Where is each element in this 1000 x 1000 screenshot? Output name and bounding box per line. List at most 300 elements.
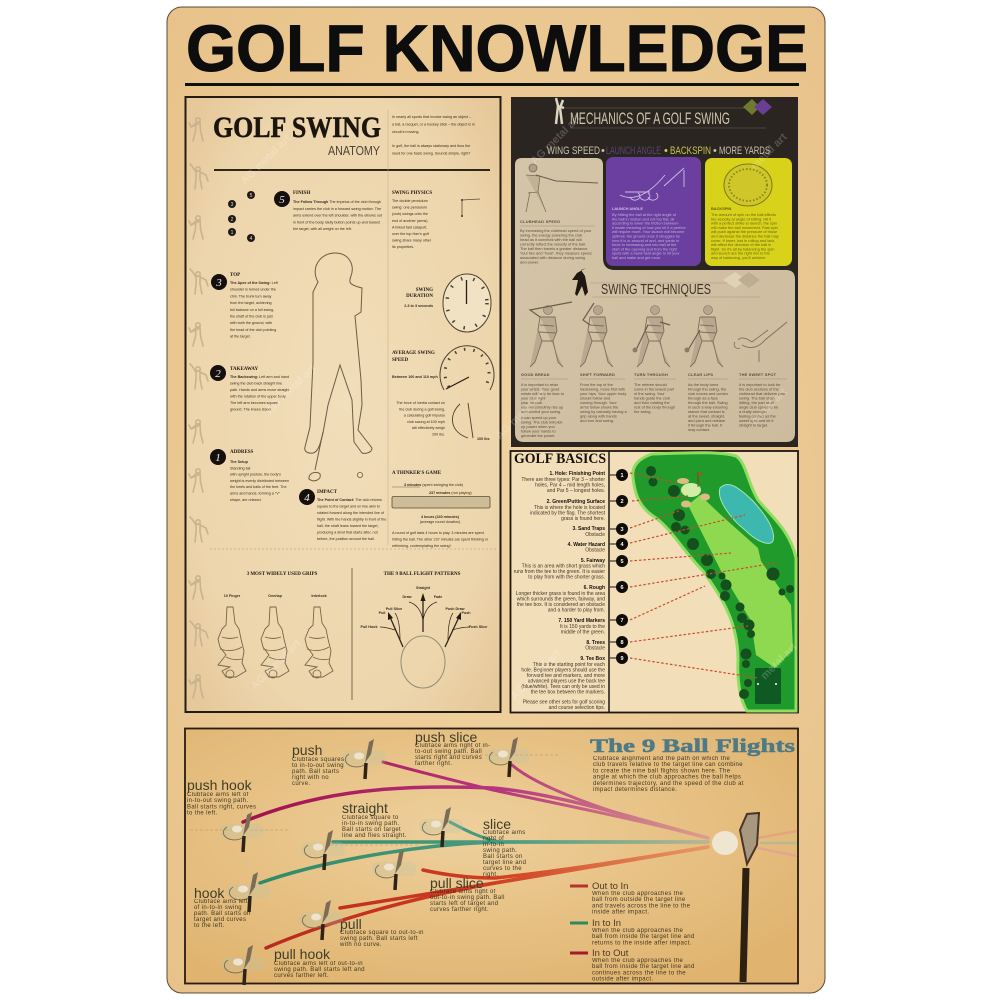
card: backspin: will affect the direction of the ball in <box>711 242 771 247</box>
legend: in to in: In to In <box>592 918 621 929</box>
legend: in to in <box>570 918 695 946</box>
clubhead speed note: will effectively weigh <box>412 426 445 430</box>
basics definitions <box>514 471 606 711</box>
metal sign board <box>167 7 825 993</box>
step 5 finish: 5 <box>279 194 285 206</box>
label: hook: of in-to-in swing <box>194 905 242 911</box>
basics definitions: Obstacle <box>585 646 605 652</box>
label: pull hook: swing path. Ball starts left and <box>274 967 365 973</box>
label: pull hook: pull hook <box>274 946 331 962</box>
card: clubhead speed: head as it connects with the ball will <box>520 237 582 242</box>
label: hook: to the left. <box>194 923 225 929</box>
step 5 finish: FINISH <box>293 191 310 196</box>
step 2 takeaway: The left arm becomes square <box>230 401 278 405</box>
card: clubhead speed: CLUBHEAD SPEED <box>520 219 560 224</box>
label: push: curve. <box>292 781 310 787</box>
legend: in to out: outside after impact. <box>592 977 653 983</box>
technique text columns: straight to target. <box>739 422 768 428</box>
panel: the 9 ball flights <box>185 728 798 985</box>
card: clubhead speed: associated with distance during swing <box>520 255 585 260</box>
watermarks <box>239 112 800 702</box>
intro text: In golf, the ball is always stationary and thus the <box>392 144 470 148</box>
heading: The 9 Ball Flights <box>590 736 795 757</box>
card: launch angle: will require more. Your launch will become <box>612 229 684 234</box>
technique text columns: may contact. <box>688 427 710 432</box>
small clubs and balls <box>220 737 530 985</box>
technique text columns: year on club <box>521 400 542 405</box>
technique text columns: you will smoothly rise up <box>521 404 563 410</box>
intro text: In nearly all sports that involve swing an object – <box>392 115 471 119</box>
technique text columns: come in the lowest part <box>634 386 675 392</box>
step 3 top: TOP <box>230 273 240 278</box>
technique text columns: at the sweet, straight, <box>688 414 725 418</box>
heading: golf swing: GOLF SWING <box>213 111 381 144</box>
step 4 impact: square to the target and on line akin to <box>317 504 380 508</box>
legend: out to in <box>570 881 691 916</box>
basics definitions: runs from the tee to the green. It is easier <box>514 569 605 575</box>
subtitle factors: • <box>664 145 668 157</box>
ball flight patterns: Pull Slice <box>386 607 402 611</box>
label: straight: in-to-in swing path. <box>342 821 399 827</box>
numbered markers: 1 <box>620 473 624 479</box>
intro text: a bat, a racquet, or a hockey stick – the object is in <box>392 122 475 126</box>
basics definitions: 8. Trees <box>586 640 605 646</box>
tee box <box>755 668 781 704</box>
step 4 impact: ball, the shaft leans toward the target, <box>317 524 378 528</box>
numbered markers: 4 <box>620 542 624 548</box>
label: pull hook: Clubface aims left of out-to-in <box>274 961 363 967</box>
numbered markers: 6 <box>620 585 624 591</box>
card: launch angle <box>606 157 701 266</box>
step 3 top: from the target, achieving <box>230 301 272 305</box>
step 1 address: shape, are relaxed. <box>230 498 262 502</box>
mechanics heading <box>556 98 766 128</box>
subtitle factors: LAUNCH ANGLE <box>606 145 661 157</box>
label: hook <box>194 885 251 929</box>
basics definitions: Obstacle <box>585 532 605 538</box>
watermarks: AG metal art <box>509 647 564 702</box>
panel: mechanics of a golf swing <box>511 97 798 447</box>
label: push: right with no <box>292 775 329 781</box>
watermarks: AG metal art <box>529 112 584 167</box>
card: clubhead speed: By increasing the clubhead speed of your <box>520 228 591 233</box>
ball flight patterns: Pull Hook <box>360 625 378 629</box>
swing duration clock: DURATION <box>406 294 433 299</box>
step 2 takeaway: path. Hands and arms move straight <box>230 388 289 392</box>
basics definitions: hole. Beginner players should use the <box>521 668 605 674</box>
swing physics: swing: one pendulum <box>392 206 427 210</box>
step 3 top <box>211 273 278 339</box>
label: pull: pull <box>340 916 362 932</box>
technique text columns: and pivot and release <box>688 418 725 423</box>
subtitle factors: BACKSPIN <box>670 145 711 157</box>
heading: golf swing: ANATOMY <box>328 143 380 158</box>
basics definitions: 1. Hole: Finishing Point <box>549 471 605 477</box>
technique text columns: CLEAR LIPS <box>688 372 713 377</box>
swing physics <box>392 191 480 249</box>
step 4 impact: producing a divot that starts after, not <box>317 530 378 534</box>
legend: in to out: In to Out <box>592 948 629 959</box>
basics definitions: which surrounds the green, fairway, and <box>517 596 605 602</box>
technique text columns: GOOD BREAK <box>521 372 550 377</box>
step 3 top: the shaft of the club is just <box>230 314 273 318</box>
basics definitions: There are three types: Par 3 – shorter <box>521 477 605 483</box>
intro text: circuit in moving. <box>392 130 419 134</box>
step 2 takeaway: swing the club back straight line <box>230 382 282 386</box>
intro: determines trajectory, and the speed of the club at <box>593 781 744 787</box>
label: pull slice: curves farther right. <box>430 907 489 913</box>
card: backspin: the velocity at angle of lofting. Hit it <box>711 216 772 221</box>
label: push slice: Clubface aims right of in- <box>415 743 490 749</box>
step 3 top: with both the ground, with <box>230 321 272 325</box>
card: launch angle: By hitting the ball at the right angle of <box>612 212 676 217</box>
label: hook: path. Ball starts on <box>194 911 251 917</box>
technique text columns: SHIFT FORWARD <box>580 372 615 377</box>
card: backspin: cover. If lower, lost in rolling and lack, <box>711 238 775 243</box>
swing physics: SWING PHYSICS <box>392 191 432 196</box>
section dividers <box>210 110 498 700</box>
technique text columns: your club right <box>521 396 546 400</box>
subtitle factors: • <box>713 145 717 157</box>
technique text columns: stance that contact is <box>688 409 725 414</box>
step 5 finish: in front of the body. Belly button points up and toward <box>293 220 380 224</box>
legend: out to in: inside after impact. <box>592 910 649 916</box>
card: launch angle: start of the opening and from the right <box>612 246 678 251</box>
position dots: 4 <box>250 236 253 242</box>
legend: in to out: When the club approaches the <box>592 958 683 964</box>
technique text columns: swing. The club will pick <box>521 420 562 424</box>
golf course map <box>630 453 796 711</box>
legend: out to in: ball from outside the target line <box>592 897 686 903</box>
card: backspin: flight. So it's all by balancing the spin <box>711 246 774 251</box>
card: backspin: will make the ball movement. Fast spin <box>711 225 778 230</box>
card: clubhead speed: The ball then travels a greater distance. <box>520 246 588 251</box>
label: pull slice: starts left of target and <box>430 901 498 907</box>
clubhead speed note: 200 lbs. <box>432 432 445 436</box>
technique text columns: sweet spot and let it <box>739 418 774 423</box>
card: backspin: way of balancing, you'll achieve <box>711 255 765 260</box>
watermarks: AG metal art <box>249 637 304 692</box>
label: pull slice: out-to-in swing path. Ball <box>430 895 505 901</box>
basics definitions: the tee box. It is considered an obstacle <box>517 602 605 608</box>
card: launch angle: how it is or around of and, and yards in <box>612 238 679 243</box>
label: pull: swing path. Ball starts left <box>340 936 418 942</box>
technique text columns: It is important to relax <box>521 382 558 387</box>
label: straight: Ball starts on target <box>342 827 401 833</box>
technique text columns: From the top of the <box>580 382 613 387</box>
label: slice: right of <box>483 836 504 842</box>
swing physics: A linked fast catapult, <box>392 225 427 229</box>
basics definitions: advanced players use the back tee <box>528 678 605 684</box>
card: clubhead speed: and power. <box>520 260 539 264</box>
technique text columns: angle club speed to be <box>739 404 778 410</box>
a thinker's game <box>392 471 490 548</box>
basics definitions: middle of the green. <box>561 630 605 636</box>
step 5 finish: the target, with all weight on the left. <box>293 227 352 231</box>
step 3 top: full balance on a full swing, <box>230 308 274 312</box>
basics definitions: This is the starting point for each <box>533 662 605 668</box>
card: clubhead speed and swing techniques background <box>515 158 795 442</box>
step 3 top: The Apex of the Swing: Left <box>230 281 278 285</box>
subtitle factors: WING SPEED <box>547 145 600 157</box>
basics definitions: holes, Par 4 – mid length holes, <box>535 482 605 488</box>
ball flight patterns: Push Draw <box>445 607 465 611</box>
technique figures <box>530 302 787 367</box>
technique text columns: of the swing. Your <box>634 391 665 396</box>
legend: in to in: returns to the inside after impact. <box>592 940 692 946</box>
numbered markers: 8 <box>620 640 624 646</box>
label: push: to in-to-out swing <box>292 763 344 769</box>
swing duration clock: SWING <box>416 288 433 293</box>
ball flight patterns: THE 9 BALL FLIGHT PATTERNS <box>384 572 461 577</box>
technique text columns: follow your hands to <box>521 428 556 434</box>
clubhead speed note: The force of inertia contact on <box>396 401 445 405</box>
technique text columns: your wrists. Your good <box>521 386 559 392</box>
technique text columns <box>521 372 787 438</box>
average speed gauge <box>392 346 494 390</box>
label: push slice: farther right. <box>415 761 452 767</box>
clubhead speed note: the club during a golf swing, <box>399 407 445 411</box>
technique text columns: backswing, move first with <box>580 386 625 392</box>
a thinker's game: 3 minutes (spent swinging the club) <box>404 483 463 487</box>
step 3 top: shoulder is turned under the <box>230 288 276 292</box>
card: backspin: with a perfect strike to launch, the spin <box>711 221 777 226</box>
numbered markers: 5 <box>620 559 624 565</box>
grips: Interlock <box>311 594 328 598</box>
position dots: 1 <box>231 230 234 236</box>
basics definitions: It is 150 yards to the <box>560 624 605 630</box>
step 2 takeaway: ground. The knees stand. <box>230 408 272 412</box>
step 4 impact: IMPACT <box>317 490 338 495</box>
step 2 takeaway: 2 <box>215 368 221 380</box>
legend: out to in: When the club approaches the <box>592 891 683 897</box>
swing duration clock <box>404 274 491 332</box>
technique text columns: grip along with hands <box>580 414 617 418</box>
swing physics: swing share many other <box>392 239 432 243</box>
label: push slice: starts right and curves <box>415 755 482 761</box>
card: launch angle: ball and make and get more. <box>612 255 661 260</box>
label: push: Clubface squares <box>292 757 344 763</box>
technique text columns: TURN THROUGH <box>634 372 668 377</box>
trees <box>646 466 794 699</box>
basics definitions: and Par 5 – longest holes. <box>547 488 605 494</box>
legend: in to in: ball from inside the target line and <box>592 934 695 940</box>
basics definitions: Longer thicker grass is found in the area <box>516 591 605 597</box>
basics definitions: 7. 150 Yard Markers <box>558 618 605 624</box>
technique text columns: swing by naturally having a <box>580 409 628 414</box>
technique text columns: hands guide the club <box>634 396 670 400</box>
technique text columns: the club sections of the <box>739 386 779 392</box>
ball flight patterns: Straight <box>416 586 431 590</box>
label: straight: Clubface square to <box>342 815 399 821</box>
ball flight patterns: Pull <box>379 611 385 615</box>
numbered markers: 9 <box>620 656 624 662</box>
label: push hook: push hook <box>187 777 253 793</box>
watermarks: metal art <box>749 386 790 427</box>
step 2 takeaway <box>210 365 289 412</box>
label: pull slice <box>430 875 505 913</box>
label: push: path. Ball starts <box>292 769 339 775</box>
ball flight patterns: Fade <box>434 595 442 599</box>
technique text columns: rest of the body through <box>634 404 675 410</box>
average speed gauge: AVERAGE SWING <box>392 351 435 356</box>
technique text columns: your hips. Your upper body <box>580 391 626 396</box>
clubhead speed note: 100 lbs <box>477 437 490 441</box>
card: launch angle: it inside meaning of how you hit it a perfect <box>612 225 686 230</box>
label: slice: Clubface aims <box>483 830 526 836</box>
step 1 address <box>210 449 289 502</box>
label: push slice <box>415 729 490 767</box>
step 4 impact: flight. With the hands slightly in front of the <box>317 518 386 522</box>
watermarks: AG metal art <box>264 362 319 417</box>
technique text columns: clubhead that delivers your <box>739 391 786 396</box>
swing techniques heading <box>572 268 760 298</box>
step 3 top: the head of the club pointing <box>230 328 276 332</box>
basics definitions: Obstacle <box>585 548 605 554</box>
intro: to create the nine ball flights shown here. The <box>593 768 731 774</box>
label: push hook: Ball starts right, curves <box>187 804 256 810</box>
step 4 impact <box>299 489 386 541</box>
basics definitions: This is where the hole is located <box>534 505 605 511</box>
label: hook: target and curves <box>194 917 246 923</box>
rough <box>633 453 796 711</box>
step 1 address: 1 <box>215 452 221 464</box>
step 1 address: arms and hands, forming a "V" <box>230 492 281 496</box>
card: launch angle: according to lower the friction between <box>612 221 678 226</box>
label: straight: straight <box>342 800 388 816</box>
step 5 finish <box>274 191 382 231</box>
watermarks: metal art <box>749 131 790 172</box>
a thinker's game: A THINKER'S GAME <box>392 471 442 476</box>
card: backspin: will push against the pressure of those <box>711 229 777 234</box>
subtitle factors: • <box>601 145 605 157</box>
clubhead speed note: club swung at 100 mph <box>407 420 445 424</box>
grips <box>218 572 333 678</box>
label: slice: target line and <box>483 860 526 866</box>
legend: in to in: When the club approaches the <box>592 928 683 934</box>
basics definitions: and a harder to play from. <box>548 608 605 614</box>
label: hook: Clubface aims left <box>194 899 248 905</box>
technique text columns: It is important to look for <box>739 382 781 387</box>
step 3 top: 3 <box>215 277 222 289</box>
fairway <box>688 495 793 668</box>
label: pull: with no curve. <box>339 942 382 948</box>
decorative diamonds <box>743 99 772 115</box>
flight paths <box>243 762 708 948</box>
step 3 top: at the target. <box>230 335 251 339</box>
step 4 impact: before, the position around the ball. <box>317 537 375 541</box>
a thinker's game: 237 minutes (not playing) <box>429 491 472 495</box>
label: push hook: Clubface aims left of <box>187 792 249 798</box>
label: push <box>292 742 344 787</box>
ball flight patterns: Push <box>461 611 471 615</box>
technique text columns: in such a way ensuring <box>688 404 728 410</box>
technique text columns: feeling contact as the <box>739 414 776 418</box>
card: backspin: The amount of spin on the ball affects <box>711 212 776 217</box>
card: launch angle: LAUNCH ANGLE <box>612 206 643 211</box>
label: slice: in-to-in <box>483 842 504 848</box>
technique text columns: should follow and <box>580 396 610 400</box>
technique text columns: it through the ball. It <box>688 422 723 428</box>
mechanics heading: MECHANICS OF A GOLF SWING <box>570 109 730 128</box>
large club and ball <box>712 813 759 982</box>
label: pull hook <box>274 946 365 979</box>
a thinker's game: A round of golf lasts 4 hours to play. 3 minutes are spent <box>392 531 484 535</box>
card: launch angle: force in increasing and into ball at the <box>612 242 676 247</box>
intro: angle at which the club approaches the ball helps <box>593 775 741 781</box>
label: slice <box>483 816 526 878</box>
legend: in to out <box>570 948 695 983</box>
grips: Overlap <box>268 594 283 598</box>
position dots: 3 <box>231 202 234 208</box>
ball flight patterns: Push Slice <box>469 625 487 629</box>
panel: golf basics <box>510 451 798 712</box>
label: pull slice: Clubface aims right of <box>430 889 496 895</box>
exit lines <box>758 831 797 856</box>
basics definitions: 5. Fairway <box>581 558 605 564</box>
technique text columns: and then rotating the <box>634 400 670 405</box>
intro: impact determines distance. <box>593 787 677 793</box>
grips: 10 Finger <box>224 594 241 598</box>
a thinker's game: 4 hours (240 minutes) <box>421 515 460 519</box>
legend: out to in: Out to In <box>592 881 628 892</box>
step 5 finish: The Follow Through The impetus of the club through <box>293 200 381 204</box>
step 5 finish: impact carries the club in a forward swing motion. The <box>293 207 381 211</box>
label: push hook: to the left. <box>187 811 218 817</box>
ball flight patterns: Draw <box>402 595 412 599</box>
card: clubhead speed: swing, the energy powering the club <box>520 232 582 238</box>
label: slice: slice <box>483 816 511 832</box>
label: slice: Ball starts on <box>483 854 523 860</box>
label: pull hook: curves farther left. <box>274 973 329 979</box>
basics definitions: 2. Green/Putting Surface <box>547 499 605 505</box>
label: push hook <box>187 777 256 817</box>
clubhead speed note <box>396 401 490 441</box>
basics definitions: forward tee and markers, and more <box>527 673 605 679</box>
technique text columns: As the body turns <box>688 382 718 387</box>
watermarks: AG metal art <box>494 387 549 442</box>
pond <box>719 484 773 543</box>
ball flight patterns <box>360 572 487 688</box>
technique text columns: through the swing, the <box>688 386 726 392</box>
swing physics: its properties. <box>392 245 414 249</box>
swing physics: The double pendulum <box>392 199 428 203</box>
basics definitions: grass is found here. <box>561 516 605 522</box>
technique text columns: club moves and comes <box>688 391 728 396</box>
subtitle factors: MORE YARDS <box>719 145 770 157</box>
numbered markers: 7 <box>620 618 624 624</box>
legend: in to out: ball from inside the target line and <box>592 964 695 970</box>
a thinker's game: (average round duration) <box>420 520 460 524</box>
label: push slice: to-out swing path. Ball <box>415 749 482 755</box>
card: backspin: BACKSPIN <box>711 206 732 211</box>
step 1 address: ADDRESS <box>230 450 254 455</box>
label: pull: Clubface square to out-to-in <box>340 930 424 936</box>
technique text columns: wrists will help be face to <box>521 391 564 396</box>
step 2 takeaway: TAKEAWAY <box>230 367 258 372</box>
technique text columns: coming through. Your <box>580 400 617 405</box>
step 3 top: chin. The trunk turn away <box>230 294 271 298</box>
swing physics: (club) swings onto the <box>392 212 428 216</box>
target line <box>190 755 560 845</box>
technique text columns: and control your swing. <box>521 409 561 414</box>
technique text columns: THE SWEET SPOT <box>739 372 777 377</box>
basics definitions: Please see other sets for golf scoring <box>523 700 605 706</box>
intro: club travels relative to the target line can combine <box>593 762 743 768</box>
title: GOLF KNOWLEDGE <box>186 11 808 85</box>
technique text columns: The referee should <box>634 382 667 387</box>
swing physics: end of another (arms). <box>392 219 428 223</box>
